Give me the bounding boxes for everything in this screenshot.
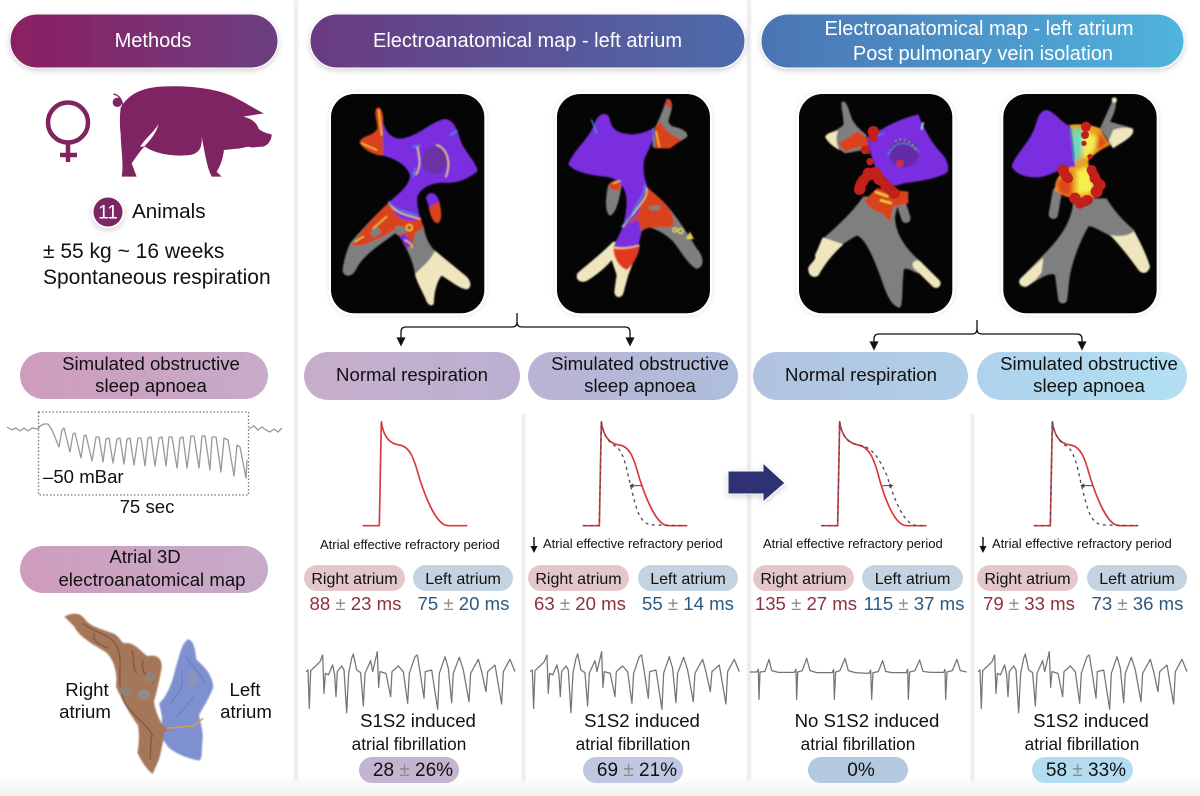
text: animal details: Spontaneous respiration	[43, 266, 271, 289]
result: column 4: 58 ± 33%	[1046, 760, 1126, 781]
values: column 2	[528, 565, 738, 614]
chart: pressure trace: –50 mBar	[43, 466, 124, 487]
heading: post pulmonary vein isolation	[761, 14, 1184, 68]
badge: 11 animals	[92, 196, 206, 228]
chart: electrogram column 2	[530, 652, 739, 713]
text: refractory period column 1: Atrial effective refractory period	[320, 537, 500, 552]
values: column 3: Right atrium	[760, 571, 847, 588]
result: column 1: atrial fibrillation	[352, 734, 466, 754]
result: column 2: S1S2 induced	[584, 710, 700, 731]
illustration: right and left atrium model	[64, 614, 213, 774]
values: column 1: Right atrium	[311, 571, 398, 588]
values: column 3	[753, 565, 964, 614]
result: column 4: atrial fibrillation	[1025, 734, 1139, 754]
heading: normal respiration post isolation: Normal respiration	[785, 364, 937, 385]
result: column 3: 0%	[847, 760, 875, 781]
heading: Methods	[10, 14, 278, 68]
heading: simulated obstructive sleep apnoea pre isolation: Simulated obstructive	[551, 353, 729, 374]
heading: normal respiration post isolation	[753, 352, 968, 400]
map: post isolation view 1	[799, 94, 952, 313]
label: left atrium	[220, 679, 272, 722]
values: column 4: Right atrium	[984, 571, 1071, 588]
chart: electrogram column 1	[306, 652, 515, 713]
map: left atrium view 2	[557, 94, 710, 313]
result: column 4: S1S2 induced	[1033, 710, 1149, 731]
label: left atrium: atrium	[220, 701, 272, 722]
values: column 2: 63 ± 20 ms	[534, 593, 626, 614]
result: column 1: 28 ± 26%	[373, 760, 453, 781]
label: left atrium: Left	[229, 679, 261, 700]
badge: 11 animals: Animals	[132, 200, 206, 223]
arrow: before to after isolation	[728, 463, 785, 502]
values: column 3: 115 ± 37 ms	[864, 593, 964, 614]
heading: post pulmonary vein isolation: Post pulmonary vein isolation	[853, 43, 1113, 65]
heading: simulated obstructive sleep apnoea pre isolation	[528, 352, 738, 400]
values: column 4: 73 ± 36 ms	[1092, 593, 1183, 614]
result: column 3: atrial fibrillation	[801, 734, 915, 754]
values: column 2: Left atrium	[650, 571, 726, 588]
map: post isolation view 2	[1003, 94, 1157, 313]
chart: pressure trace	[7, 412, 282, 517]
values: column 4	[977, 565, 1187, 614]
result: column 2: 69 ± 21%	[597, 760, 677, 781]
arrow: bracket to first pair	[398, 313, 634, 345]
chart: electrogram column 4	[978, 652, 1187, 713]
values: column 4: Left atrium	[1099, 571, 1175, 588]
heading: simulated obstructive sleep apnoea post isolation: sleep apnoea	[1033, 375, 1145, 396]
heading: Methods: Methods	[115, 30, 191, 52]
heading: atrial 3D electroanatomical map: electroanatomical map	[58, 569, 246, 590]
result: column 2: atrial fibrillation	[576, 734, 690, 754]
label: right atrium: atrium	[59, 701, 111, 722]
text: refractory period column 3: Atrial effective refractory period	[763, 536, 943, 551]
heading: normal respiration: Normal respiration	[336, 364, 488, 385]
heading: electroanatomical map left atrium: Electroanatomical map - left atrium	[373, 30, 682, 52]
result: column 4	[1025, 710, 1149, 783]
values: column 2: 55 ± 14 ms	[642, 593, 734, 614]
label: right atrium: Right	[65, 679, 110, 700]
chart: action potential, apnoea	[583, 422, 687, 526]
chart: pressure trace: 75 sec	[120, 496, 174, 517]
arrow: bracket to second pair	[870, 320, 1086, 349]
heading: simulated obstructive sleep apnoea: Simulated obstructive	[62, 353, 240, 374]
panel: methods	[7, 14, 282, 774]
text: refractory period column 4: Atrial effective refractory period	[992, 536, 1172, 551]
heading: simulated obstructive sleep apnoea pre isolation: sleep apnoea	[584, 375, 696, 396]
heading: post pulmonary vein isolation: Electroanatomical map - left atrium	[824, 18, 1134, 40]
text: refractory period column 2: Atrial effective refractory period	[543, 536, 723, 551]
chart: electrogram column 3	[750, 658, 967, 699]
values: column 1: Left atrium	[425, 571, 501, 588]
values: column 1: 75 ± 20 ms	[418, 593, 509, 614]
map: left atrium view 1	[331, 94, 484, 313]
icon: pig silhouette	[113, 86, 272, 177]
values: column 4: 79 ± 33 ms	[983, 593, 1075, 614]
values: column 2: Right atrium	[535, 571, 622, 588]
result: column 2	[576, 710, 700, 783]
badge: 11 animals: 11	[98, 202, 118, 224]
heading: simulated obstructive sleep apnoea post isolation	[977, 352, 1187, 400]
chart: action potential, post isolation apnoea	[1034, 422, 1138, 526]
heading: normal respiration	[304, 352, 520, 400]
heading: simulated obstructive sleep apnoea	[20, 352, 268, 399]
heading: electroanatomical map left atrium	[310, 14, 745, 68]
heading: atrial 3D electroanatomical map: Atrial 3D	[109, 546, 181, 567]
icon: female symbol	[48, 102, 88, 162]
label: right atrium	[59, 679, 111, 722]
values: column 1	[304, 565, 513, 614]
values: column 3: Left atrium	[875, 571, 950, 588]
heading: simulated obstructive sleep apnoea: sleep apnoea	[95, 375, 207, 396]
text: animal details: ± 55 kg ~ 16 weeks	[43, 240, 224, 263]
result: column 3	[795, 710, 939, 783]
heading: simulated obstructive sleep apnoea post isolation: Simulated obstructive	[1000, 353, 1178, 374]
result: column 3: No S1S2 induced	[795, 710, 939, 731]
values: column 1: 88 ± 23 ms	[310, 593, 401, 614]
result: column 1	[352, 710, 476, 783]
text: animal details	[43, 240, 271, 289]
result: column 1: S1S2 induced	[360, 710, 476, 731]
values: column 3: 135 ± 27 ms	[755, 593, 857, 614]
heading: atrial 3D electroanatomical map	[20, 546, 268, 593]
chart: action potential, post isolation normal	[822, 422, 926, 526]
chart: action potential, normal respiration	[363, 422, 467, 526]
